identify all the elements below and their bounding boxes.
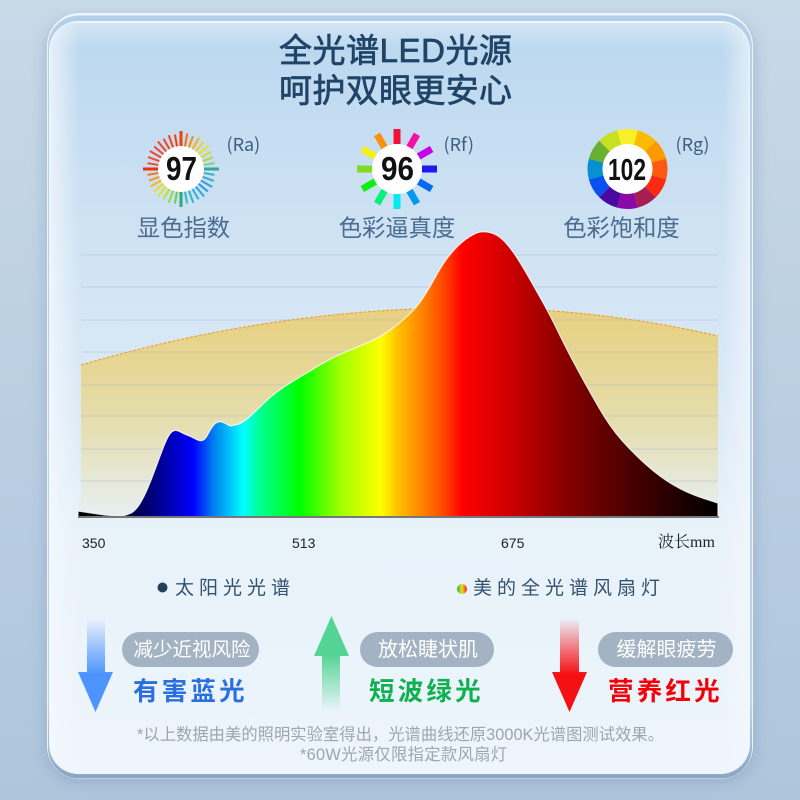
pill: 减少近视风险: 减少近视风险 xyxy=(133,639,251,661)
icon: Ra ring 97: 97 xyxy=(166,150,197,187)
legend: full-spectrum lamp: 美的全光谱风扇灯 xyxy=(473,577,665,599)
axis labels xyxy=(82,533,715,551)
title xyxy=(279,32,512,109)
title: 全光谱LED光源 xyxy=(279,32,512,69)
pill: 减少近视风险 xyxy=(122,632,259,667)
arrow: blue down xyxy=(78,618,113,712)
label: 色彩逼真度: 色彩逼真度 xyxy=(339,215,455,241)
axis labels: 350 xyxy=(82,535,106,551)
heading: 营养红光: 营养红光 xyxy=(608,678,723,706)
label: 显色指数: 显色指数 xyxy=(137,215,230,241)
icon: Rf ring 96 xyxy=(357,129,437,209)
label: 色彩饱和度: 色彩饱和度 xyxy=(563,215,680,241)
title: 呵护双眼更安心 xyxy=(279,72,512,109)
footnotes xyxy=(137,726,664,764)
pill: 放松睫状肌 xyxy=(360,632,494,667)
label: Ra: (Ra) xyxy=(226,131,260,157)
legend: sunlight: 太阳光光谱 xyxy=(175,577,295,599)
icon: Ra ring 97 xyxy=(143,131,219,207)
label: Rf: (Rf) xyxy=(444,131,474,157)
icon: Rg wheel 102 xyxy=(587,129,668,209)
icon: Rf ring 96: 96 xyxy=(381,150,414,187)
chart: spectrum xyxy=(78,232,719,518)
footnotes: *60W光源仅限指定款风扇灯 xyxy=(300,746,507,764)
sunlight spectrum area xyxy=(81,308,718,517)
axis labels: 513 xyxy=(292,535,316,551)
heading: 有害蓝光: 有害蓝光 xyxy=(133,678,248,706)
arrow: red down xyxy=(552,618,587,712)
label: Rg: (Rg) xyxy=(676,131,709,157)
pill: 放松睫状肌: 放松睫状肌 xyxy=(378,638,478,661)
arrow: green up xyxy=(314,616,349,712)
pill: 缓解眼疲劳 xyxy=(598,632,733,667)
LED spectrum curve xyxy=(78,232,718,517)
axis labels: 波长mm xyxy=(658,533,715,551)
heading: 短波绿光: 短波绿光 xyxy=(369,678,484,706)
pill: 缓解眼疲劳: 缓解眼疲劳 xyxy=(616,638,716,661)
footnotes: *以上数据由美的照明实验室得出，光谱曲线还原3000K光谱图测试效果。 xyxy=(137,726,664,744)
axis labels: 675 xyxy=(501,535,525,551)
icon: Rg wheel 102: 102 xyxy=(608,152,646,187)
